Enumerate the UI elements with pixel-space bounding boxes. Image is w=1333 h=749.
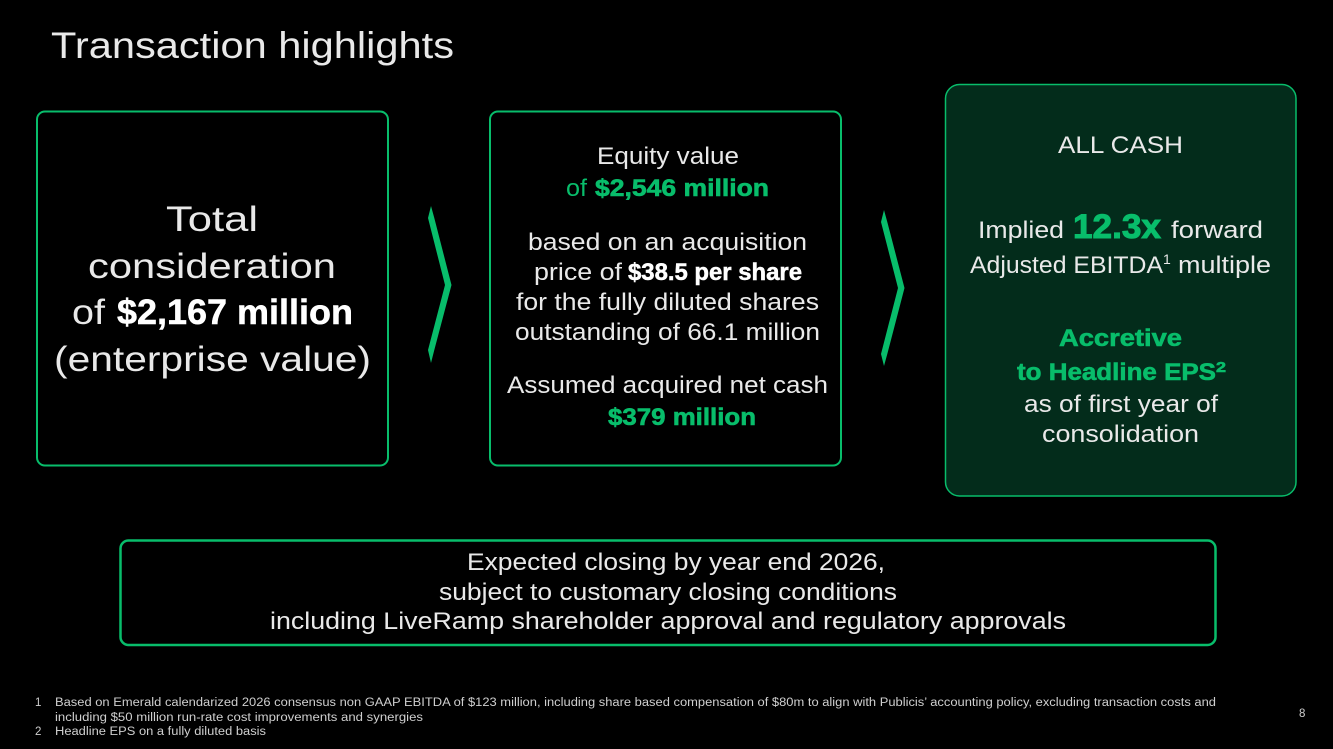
panel: equity value: for the fully diluted shares bbox=[516, 289, 819, 316]
footnotes: 2 bbox=[35, 726, 41, 738]
footnotes bbox=[35, 697, 1216, 738]
panel: all cash: 2 bbox=[1216, 359, 1226, 376]
panel: total consideration: (enterprise value) bbox=[54, 340, 371, 379]
footnotes: Headline EPS on a fully diluted basis bbox=[55, 726, 266, 738]
panel: all cash: consolidation bbox=[1042, 421, 1199, 448]
panel: all cash: forward bbox=[1171, 217, 1263, 244]
panel: all cash: 1 bbox=[1163, 251, 1171, 267]
panel: equity value: outstanding of 66.1 million bbox=[515, 319, 820, 346]
panel: equity value: $379 million bbox=[608, 404, 756, 431]
panel: expected closing: subject to customary closing conditions bbox=[439, 579, 897, 606]
panel: total consideration bbox=[37, 112, 388, 466]
panel: equity value: of bbox=[566, 175, 587, 202]
footnotes: 1 bbox=[35, 697, 41, 709]
panel: equity value: price of bbox=[534, 259, 622, 286]
arrow: chevron 2 bbox=[881, 210, 904, 366]
panel: total consideration: Total bbox=[166, 200, 258, 239]
arrow: chevron 1 bbox=[428, 206, 452, 363]
panel: all cash: ALL CASH bbox=[1058, 132, 1183, 159]
panel: all cash bbox=[946, 84, 1296, 496]
panel: all cash: Adjusted EBITDA bbox=[970, 252, 1163, 279]
page number: 8 bbox=[1299, 708, 1305, 720]
panel: equity value: $38.5 per share bbox=[628, 259, 802, 286]
panel: expected closing bbox=[120, 540, 1216, 645]
panel: equity value: $2,546 million bbox=[595, 175, 769, 202]
panel: all cash: 12.3x bbox=[1073, 208, 1161, 246]
panel: all cash: Implied bbox=[978, 217, 1064, 244]
panel: all cash: Accretive bbox=[1059, 325, 1182, 352]
panel: total consideration: of bbox=[72, 293, 105, 332]
title: Transaction highlights bbox=[51, 25, 454, 66]
panel: expected closing: including LiveRamp shareholder approval and regulatory approvals bbox=[270, 608, 1066, 635]
panel: all cash: to Headline EPS bbox=[1017, 359, 1216, 386]
panel: equity value bbox=[490, 112, 841, 466]
panel: total consideration: $2,167 million bbox=[117, 293, 353, 332]
panel: total consideration: consideration bbox=[88, 247, 336, 286]
panel: all cash: multiple bbox=[1178, 252, 1271, 279]
panel: equity value: Equity value bbox=[597, 143, 739, 170]
panel: all cash: as of first year of bbox=[1024, 391, 1218, 418]
footnotes: Based on Emerald calendarized 2026 consensus non GAAP EBITDA of $123 million, including share based compensation of $80m to align with Publicis’ accounting policy, excluding transaction costs and bbox=[55, 697, 1216, 709]
panel: expected closing: Expected closing by year end 2026, bbox=[467, 549, 885, 576]
panel: equity value: Assumed acquired net cash bbox=[507, 372, 828, 399]
panel: equity value: based on an acquisition bbox=[528, 229, 807, 256]
footnotes: including $50 million run-rate cost improvements and synergies bbox=[55, 712, 423, 724]
